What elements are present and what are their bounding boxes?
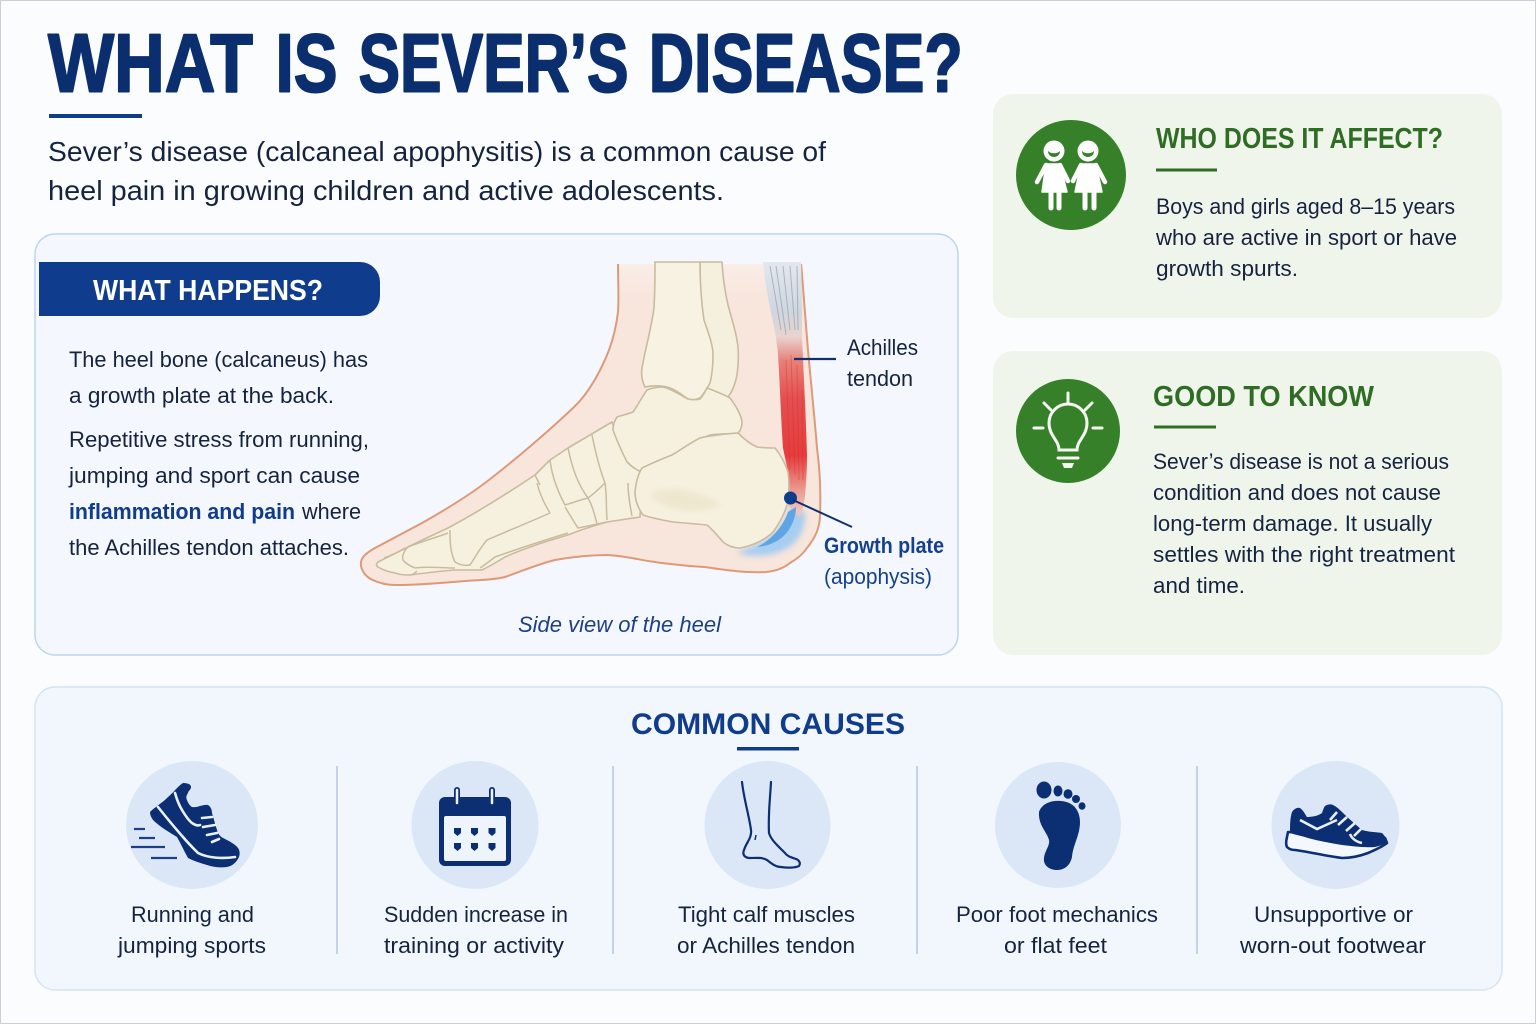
growth plate marker [784, 492, 797, 504]
body text: growth spurts. [1156, 256, 1298, 281]
title [48, 16, 963, 110]
explanation text: a growth plate at the back. [69, 383, 334, 408]
growth plate glow [737, 505, 805, 556]
heading: GOOD TO KNOW [1153, 381, 1375, 413]
label: Running and [131, 902, 254, 927]
label: growth plate [824, 533, 944, 589]
icon: calendar [412, 761, 538, 889]
label: jumping sports [117, 933, 266, 958]
title underline [49, 114, 142, 118]
body text: and time. [1153, 573, 1245, 598]
label: growth plate: (apophysis) [824, 564, 932, 589]
explanation text: jumping and sport can cause [68, 463, 360, 488]
icon: worn trainer [1272, 761, 1400, 889]
explanation text: inflammation and pain [69, 499, 295, 524]
panel: what happens [35, 234, 958, 655]
cause: unsupportive footwear [1239, 761, 1426, 958]
talus [613, 387, 742, 472]
body text: settles with the right treatment [1153, 542, 1455, 567]
calcaneus shading [648, 488, 722, 511]
label: achilles tendon: Achilles [847, 335, 918, 360]
label [1239, 902, 1426, 958]
foot illustration [361, 258, 852, 585]
label: Unsupportive or [1254, 902, 1413, 927]
cause: running and jumping [117, 761, 266, 958]
cause: tight calf muscles [677, 761, 855, 958]
label [117, 902, 266, 958]
banner: what happens: WHAT HAPPENS? [93, 275, 323, 307]
caption: Side view of the heel [518, 612, 722, 637]
panel: good to know [993, 351, 1502, 655]
label: worn-out footwear [1239, 933, 1426, 958]
achilles pointer [794, 358, 836, 360]
label: achilles tendon [847, 335, 918, 391]
label: Tight calf muscles [678, 902, 855, 927]
title: DISEASE? [649, 16, 963, 110]
heading underline [737, 747, 799, 750]
icon: light bulb [1016, 379, 1120, 483]
label: growth plate: Growth plate [824, 533, 944, 558]
growth plate [757, 507, 796, 547]
label: Sudden increase in [384, 902, 568, 927]
icon: footprint [995, 762, 1121, 888]
body text: who are active in sport or have [1155, 225, 1457, 250]
growth plate pointer [793, 500, 852, 527]
title: WHAT [48, 16, 253, 110]
label [677, 902, 855, 958]
intro text: heel pain in growing children and active adolescents. [48, 175, 724, 206]
heading: COMMON CAUSES [631, 708, 905, 741]
body text [1153, 449, 1455, 598]
top fade [610, 258, 810, 264]
explanation text: where [301, 499, 361, 524]
label [956, 902, 1158, 958]
body text: condition and does not cause [1153, 480, 1441, 505]
heading underline [1154, 426, 1216, 428]
cause: poor foot mechanics [956, 762, 1158, 958]
explanation text: the Achilles tendon attaches. [69, 535, 349, 560]
achilles tendon [763, 262, 807, 518]
label: Poor foot mechanics [956, 902, 1158, 927]
title: SEVER’S [358, 16, 628, 110]
icon: two children [1016, 120, 1126, 230]
explanation text: The heel bone (calcaneus) has [69, 347, 368, 372]
heading: WHO DOES IT AFFECT? [1156, 123, 1443, 155]
calcaneus [635, 433, 789, 548]
panel: who does it affect [993, 94, 1502, 318]
banner: what happens [39, 262, 380, 316]
label: achilles tendon: tendon [847, 366, 913, 391]
tibia [642, 262, 713, 400]
icon: running shoe [126, 761, 258, 889]
explanation text [68, 347, 369, 560]
label: or Achilles tendon [677, 933, 855, 958]
explanation text: Repetitive stress from running, [69, 427, 369, 452]
intro text: Sever’s disease (calcaneal apophysitis) is a common cause of [48, 136, 826, 167]
label: or flat feet [1004, 933, 1107, 958]
intro text [48, 136, 826, 206]
label [384, 902, 568, 958]
body text: Sever’s disease is not a serious [1153, 449, 1449, 474]
skin outline [361, 262, 820, 585]
fibula [700, 262, 738, 397]
body text: long-term damage. It usually [1153, 511, 1432, 536]
cause: sudden increase in training [384, 761, 568, 958]
label: training or activity [384, 933, 564, 958]
panel: common causes [35, 687, 1502, 990]
body text [1155, 194, 1457, 281]
forefoot bones [376, 422, 642, 575]
body text: Boys and girls aged 8–15 years [1156, 194, 1455, 219]
title: IS [276, 16, 338, 110]
heading underline [1156, 168, 1217, 172]
icon: lower leg [704, 761, 830, 889]
